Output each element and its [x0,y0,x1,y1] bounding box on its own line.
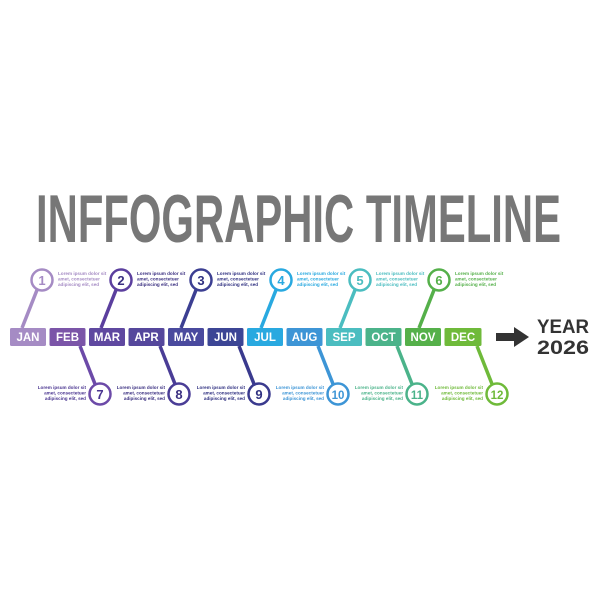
milestone 6 [419,270,504,328]
milestone 4 [261,270,346,328]
top milestones [22,270,504,328]
milestone 8: 8 [175,387,183,402]
milestone 6: adipiscing elit, sed [455,282,496,287]
month: APR [128,328,164,346]
milestone 9: Lorem ipsum dolor sit [197,385,245,390]
milestone 5: Lorem ipsum dolor sit [376,271,425,276]
milestone 7 [38,346,110,404]
milestone 6: Lorem ipsum dolor sit [455,271,504,276]
month: FEB [50,328,86,346]
milestone 2: amet, consectetuer [137,276,179,282]
milestone 8: amet, consectetuer [123,390,165,396]
milestone 7: adipiscing elit, sed [45,396,86,401]
milestone 12: amet, consectetuer [441,390,483,396]
milestone 12: 12 [491,390,503,402]
milestone 9: adipiscing elit, sed [204,396,245,401]
timeline: month boxes [10,328,482,346]
year label [537,317,589,359]
milestone 12 [435,346,508,404]
month: JAN: JAN [16,332,40,344]
milestone 10: adipiscing elit, sed [283,396,324,401]
month: SEP [326,328,362,346]
month: NOV [405,328,441,346]
milestone 3 [181,270,266,328]
milestone 4: amet, consectetuer [297,276,339,282]
month: APR: APR [134,332,159,344]
milestone 5 [340,270,425,328]
month: MAY [168,328,204,346]
month: JUN [208,328,244,346]
milestone 4: 4 [277,273,285,288]
month: AUG: AUG [292,332,317,344]
year label: YEAR [537,317,589,338]
month: JAN [10,328,46,346]
milestone 4: Lorem ipsum dolor sit [297,271,346,276]
milestone 11 [355,346,428,404]
year label: 2026 [537,338,589,359]
milestone 2: 2 [117,273,125,288]
milestone 3: amet, consectetuer [217,276,259,282]
month: JUN: JUN [214,332,237,344]
month: DEC: DEC [451,332,475,344]
milestone 8: adipiscing elit, sed [124,396,165,401]
milestone 5: amet, consectetuer [376,276,418,282]
milestone 1: Lorem ipsum dolor sit [58,271,107,276]
month: FEB: FEB [56,332,79,344]
month: JUL: JUL [254,332,276,344]
month: OCT [366,328,402,346]
arrow [496,327,529,347]
milestone 8 [117,346,190,404]
milestone 9: amet, consectetuer [203,390,245,396]
milestone 1 [22,270,107,328]
month: MAR [89,328,125,346]
month: AUG [286,328,322,346]
month: DEC [444,328,482,346]
milestone 7: amet, consectetuer [44,390,86,396]
milestone 10: 10 [332,390,344,402]
milestone 12: Lorem ipsum dolor sit [435,385,483,390]
milestone 11: amet, consectetuer [361,390,403,396]
milestone 3: Lorem ipsum dolor sit [217,271,266,276]
milestone 1: adipiscing elit, sed [58,282,99,287]
milestone 6: amet, consectetuer [455,276,497,282]
milestone 10: amet, consectetuer [282,390,324,396]
month: NOV: NOV [411,332,436,344]
bottom milestones [38,346,508,404]
milestone 2: Lorem ipsum dolor sit [137,271,186,276]
milestone 4: adipiscing elit, sed [297,282,338,287]
month: JUL [247,328,283,346]
milestone 12: adipiscing elit, sed [442,396,483,401]
milestone 10 [276,346,348,404]
milestone 3: 3 [197,273,205,288]
milestone 5: adipiscing elit, sed [376,282,417,287]
month: MAY: MAY [174,332,199,344]
month: OCT: OCT [371,332,396,344]
milestone 1: amet, consectetuer [58,276,100,282]
month: SEP: SEP [332,332,356,344]
milestone 5: 5 [356,273,364,288]
milestone 6: 6 [435,273,443,288]
milestone 7: 7 [96,387,104,402]
milestone 3: adipiscing elit, sed [217,282,258,287]
milestone 8: Lorem ipsum dolor sit [117,385,165,390]
milestone 10: Lorem ipsum dolor sit [276,385,324,390]
milestone 2: adipiscing elit, sed [137,282,178,287]
milestone 2 [101,270,186,328]
milestone 9 [197,346,270,404]
milestone 9: 9 [255,387,263,402]
month: MAR: MAR [94,332,121,344]
milestone 1: 1 [38,273,46,288]
milestone 7: Lorem ipsum dolor sit [38,385,86,390]
milestone 11: 11 [411,390,424,402]
milestone 11: Lorem ipsum dolor sit [355,385,403,390]
milestone 11: adipiscing elit, sed [362,396,403,401]
